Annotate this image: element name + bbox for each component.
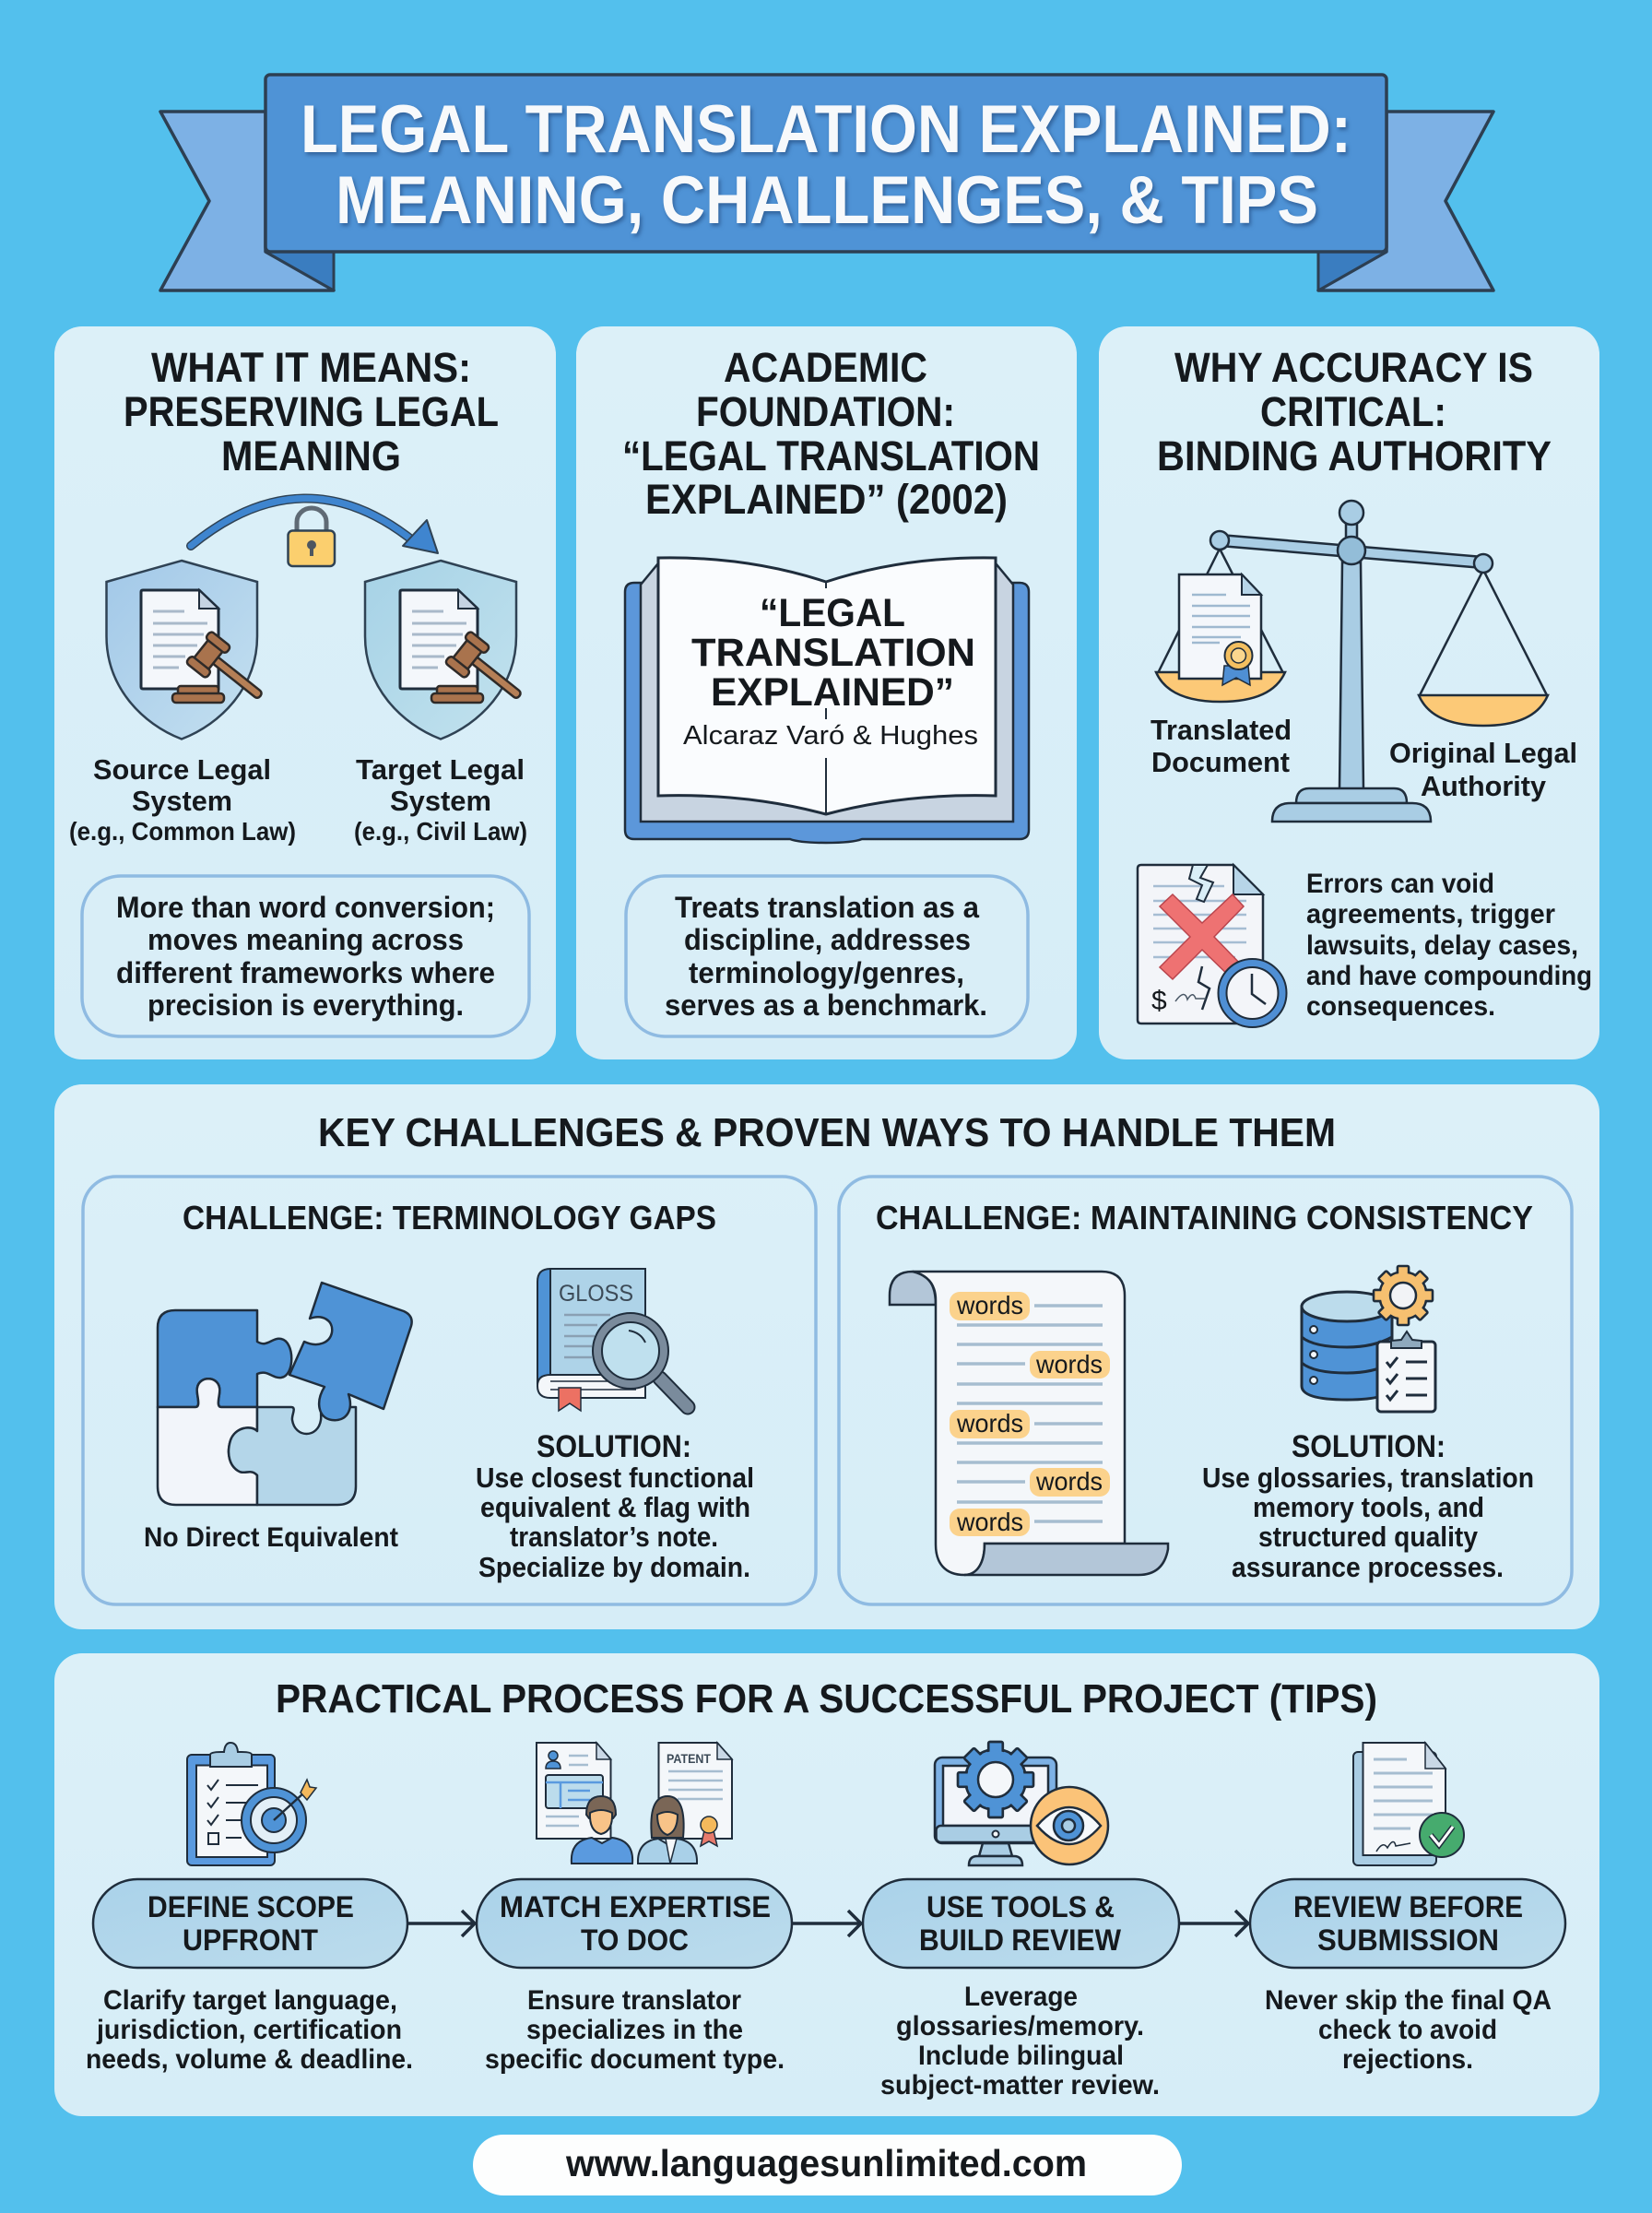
icon: source shield with document and gavel	[107, 561, 273, 740]
icon: certified translated document	[1179, 574, 1261, 685]
step: match expertise to doc: MATCH EXPERTISE	[500, 1890, 771, 1923]
text: use tools description: Include bilingual	[918, 2041, 1124, 2071]
text: consistency solution: assurance processes.	[1232, 1551, 1504, 1583]
icon: broken document with error cross and clock: $	[1151, 986, 1167, 1016]
step: define scope upfront: DEFINE SCOPE	[148, 1890, 354, 1923]
heading: why accuracy is critical: BINDING AUTHORITY	[1157, 432, 1552, 479]
callout: treats translation as a discipline: Treats translation as a	[675, 891, 979, 924]
card heading: maintaining consistency: CHALLENGE: MAINTAINING CONSISTENCY	[876, 1199, 1533, 1237]
heading: what it means: PRESERVING LEGAL	[124, 388, 499, 435]
label: source legal system	[69, 753, 296, 846]
text: review description: rejections.	[1342, 2044, 1473, 2075]
label: no direct equivalent: No Direct Equivalent	[144, 1522, 398, 1553]
arrow: step two to three	[792, 1911, 861, 1936]
step: review before submission: SUBMISSION	[1317, 1923, 1499, 1957]
callout: more than word conversion: different frameworks where	[116, 956, 495, 989]
icon: monitor with gear and eye	[935, 1742, 1108, 1865]
label: original legal authority	[1389, 737, 1577, 802]
heading: why accuracy is critical	[1157, 344, 1552, 479]
step: review before submission	[1250, 1879, 1565, 1968]
book cover title: TRANSLATION	[691, 631, 975, 675]
text: match expertise description: Ensure translator	[527, 1985, 741, 2016]
icon: scroll with repeated words: words	[1035, 1467, 1103, 1496]
text: consequences of errors: and have compounding	[1306, 961, 1592, 991]
icon: glossary book with magnifier: GLOSS	[559, 1281, 633, 1307]
text: terminology solution: translator’s note.	[510, 1521, 718, 1553]
text: consequences of errors: consequences.	[1306, 991, 1495, 1022]
main title: LEGAL TRANSLATION EXPLAINED:	[301, 92, 1351, 167]
text: define scope description	[86, 1985, 413, 2075]
arrow: step one to two	[407, 1911, 475, 1936]
icon: puzzle pieces	[158, 1283, 412, 1505]
text: match expertise description: specializes in the	[526, 2015, 743, 2045]
label: original legal authority: Authority	[1421, 770, 1547, 802]
text: review description: Never skip the final QA	[1265, 1985, 1552, 2016]
text: define scope description: needs, volume & deadline.	[86, 2044, 413, 2075]
panel: why accuracy is critical	[1099, 326, 1599, 1059]
text: review description	[1265, 1985, 1552, 2075]
callout: more than word conversion: moves meaning across	[148, 923, 464, 956]
heading: academic foundation	[622, 344, 1040, 523]
text: terminology solution: Specialize by domain.	[478, 1551, 750, 1583]
main title	[301, 92, 1351, 238]
text: define scope description: jurisdiction, certification	[96, 2015, 402, 2045]
icon: database, gear and checklist	[1302, 1266, 1435, 1412]
step: match expertise to doc	[477, 1879, 792, 1968]
heading: key challenges: KEY CHALLENGES & PROVEN WAYS TO HANDLE THEM	[318, 1110, 1336, 1155]
card: maintaining consistency	[839, 1177, 1572, 1604]
step: define scope upfront: UPFRONT	[183, 1923, 318, 1957]
book cover title: EXPLAINED”	[711, 670, 954, 715]
book cover title: “LEGAL	[760, 591, 905, 635]
heading: practical process: PRACTICAL PROCESS FOR A SUCCESSFUL PROJECT (TIPS)	[276, 1676, 1377, 1722]
step: review before submission: REVIEW BEFORE	[1293, 1890, 1523, 1923]
heading: what it means: MEANING	[221, 432, 401, 479]
icon: scroll with repeated words: words	[956, 1508, 1023, 1536]
text: use tools description: glossaries/memory.	[896, 2011, 1144, 2041]
step: use tools and build review	[863, 1879, 1179, 1968]
text: terminology solution: SOLUTION:	[537, 1429, 691, 1464]
icon: broken document with error cross and clock	[1138, 865, 1287, 1027]
callout: more than word conversion: More than word conversion;	[116, 891, 495, 924]
text: terminology solution	[476, 1429, 754, 1583]
heading: academic foundation: EXPLAINED” (2002)	[645, 476, 1008, 523]
footer website pill: www.languagesunlimited.com	[565, 2142, 1087, 2184]
text: use tools description: subject-matter review.	[880, 2070, 1160, 2101]
book cover title: Alcaraz Varó & Hughes	[683, 721, 978, 751]
panel: what it means	[54, 326, 556, 1059]
icon: target shield with document and gavel	[365, 561, 532, 740]
heading: why accuracy is critical: CRITICAL:	[1260, 388, 1446, 435]
step: use tools and build review: BUILD REVIEW	[919, 1923, 1122, 1957]
icon: scroll with repeated words: words	[956, 1291, 1023, 1320]
panel: practical process	[54, 1653, 1599, 2116]
text: consequences of errors: lawsuits, delay cases,	[1306, 930, 1578, 961]
label: source legal system: (e.g., Common Law)	[69, 817, 296, 846]
callout: treats translation as a discipline: terminology/genres,	[689, 956, 964, 989]
text: consistency solution: Use glossaries, translation	[1202, 1462, 1534, 1494]
text: define scope description: Clarify target language,	[103, 1985, 397, 2016]
icon: scroll with repeated words: words	[1035, 1350, 1103, 1379]
footer website pill	[473, 2135, 1182, 2195]
arrow: source to target	[191, 498, 438, 553]
text: consistency solution: SOLUTION:	[1292, 1429, 1446, 1464]
heading: why accuracy is critical: WHY ACCURACY IS	[1174, 344, 1533, 391]
heading: academic foundation: FOUNDATION:	[696, 388, 955, 435]
label: target legal system: Target Legal	[356, 753, 525, 786]
step: match expertise to doc: TO DOC	[581, 1923, 689, 1957]
label: translated document: Document	[1151, 746, 1290, 778]
icon: scroll with repeated words	[890, 1272, 1168, 1575]
label: original legal authority: Original Legal	[1389, 737, 1577, 769]
text: review description: check to avoid	[1318, 2015, 1497, 2045]
panel: academic foundation	[576, 326, 1077, 1059]
book cover title	[683, 591, 978, 751]
label: translated document	[1150, 714, 1292, 778]
text: consequences of errors: Errors can void	[1306, 869, 1494, 899]
text: use tools description	[880, 1982, 1160, 2101]
label: source legal system: Source Legal	[93, 753, 271, 786]
text: consequences of errors	[1306, 869, 1592, 1022]
text: terminology solution: Use closest functional	[476, 1462, 754, 1494]
callout: treats translation as a discipline	[626, 876, 1028, 1036]
heading: what it means	[124, 344, 499, 479]
text: consequences of errors: agreements, trigger	[1306, 899, 1555, 929]
icon: documents and specialist translators: PATENT	[667, 1751, 711, 1766]
text: use tools description: Leverage	[964, 1982, 1078, 2012]
text: consistency solution	[1202, 1429, 1534, 1583]
callout: more than word conversion	[82, 876, 529, 1036]
icon: documents and specialist translators	[537, 1743, 732, 1864]
label: translated document: Translated	[1150, 714, 1292, 746]
text: match expertise description	[485, 1985, 785, 2075]
icon: balance scale	[1156, 501, 1548, 822]
heading: what it means: WHAT IT MEANS:	[151, 344, 471, 391]
heading: academic foundation: ACADEMIC	[724, 344, 927, 391]
step: define scope upfront	[93, 1879, 407, 1968]
label: target legal system	[354, 753, 527, 846]
text: consistency solution: memory tools, and	[1253, 1491, 1484, 1523]
icon: signed document with checkmark	[1353, 1743, 1464, 1865]
icon: scroll with repeated words: words	[956, 1409, 1023, 1438]
text: terminology solution: equivalent & flag with	[480, 1491, 750, 1523]
card heading: terminology gaps: CHALLENGE: TERMINOLOGY GAPS	[183, 1199, 716, 1237]
step: use tools and build review: USE TOOLS &	[926, 1890, 1115, 1923]
callout: more than word conversion: precision is everything.	[148, 988, 464, 1022]
panel: key challenges	[54, 1084, 1599, 1629]
card: terminology gaps	[83, 1177, 816, 1604]
callout: treats translation as a discipline: discipline, addresses	[684, 923, 971, 956]
main title: MEANING, CHALLENGES, & TIPS	[336, 163, 1318, 238]
icon: padlock	[288, 508, 335, 566]
text: match expertise description: specific document type.	[485, 2044, 785, 2075]
icon: glossary book with magnifier	[537, 1269, 688, 1411]
icon: clipboard with target	[187, 1743, 316, 1865]
heading: academic foundation: “LEGAL TRANSLATION	[622, 432, 1040, 479]
arrow: step three to four	[1179, 1911, 1248, 1936]
title banner	[160, 75, 1493, 290]
label: target legal system: (e.g., Civil Law)	[354, 817, 527, 846]
icon: open book	[625, 558, 1029, 843]
label: source legal system: System	[132, 785, 232, 817]
callout: treats translation as a discipline: serves as a benchmark.	[665, 988, 987, 1022]
label: target legal system: System	[390, 785, 491, 817]
text: consistency solution: structured quality	[1258, 1521, 1479, 1553]
